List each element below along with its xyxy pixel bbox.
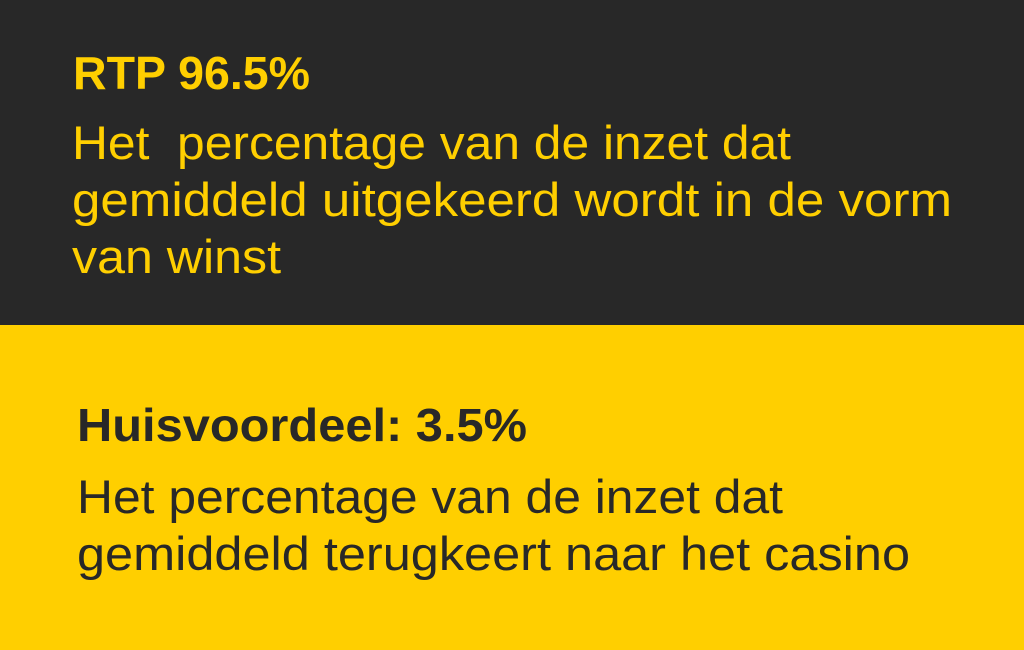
- text block: Huisvoordeel description: [77, 470, 910, 580]
- text block: RTP description: van winst: [72, 230, 281, 283]
- panel background: dark: [0, 0, 1024, 325]
- panel: RTP: [0, 0, 1024, 325]
- text block: RTP description: Het percentage van de inzet dat: [72, 116, 791, 169]
- heading: RTP 96.5%: RTP 96.5%: [73, 47, 310, 99]
- text block: Huisvoordeel description: gemiddeld terugkeert naar het casino: [77, 527, 910, 580]
- panel: Huisvoordeel: [0, 325, 1024, 650]
- panel background: yellow: [0, 325, 1024, 650]
- text block: Huisvoordeel description: Het percentage van de inzet dat: [77, 470, 783, 523]
- text block: RTP description: [72, 116, 952, 283]
- text block: RTP description: gemiddeld uitgekeerd wordt in de vorm: [72, 173, 952, 226]
- heading: Huisvoordeel 3.5%: Huisvoordeel: 3.5%: [77, 399, 527, 451]
